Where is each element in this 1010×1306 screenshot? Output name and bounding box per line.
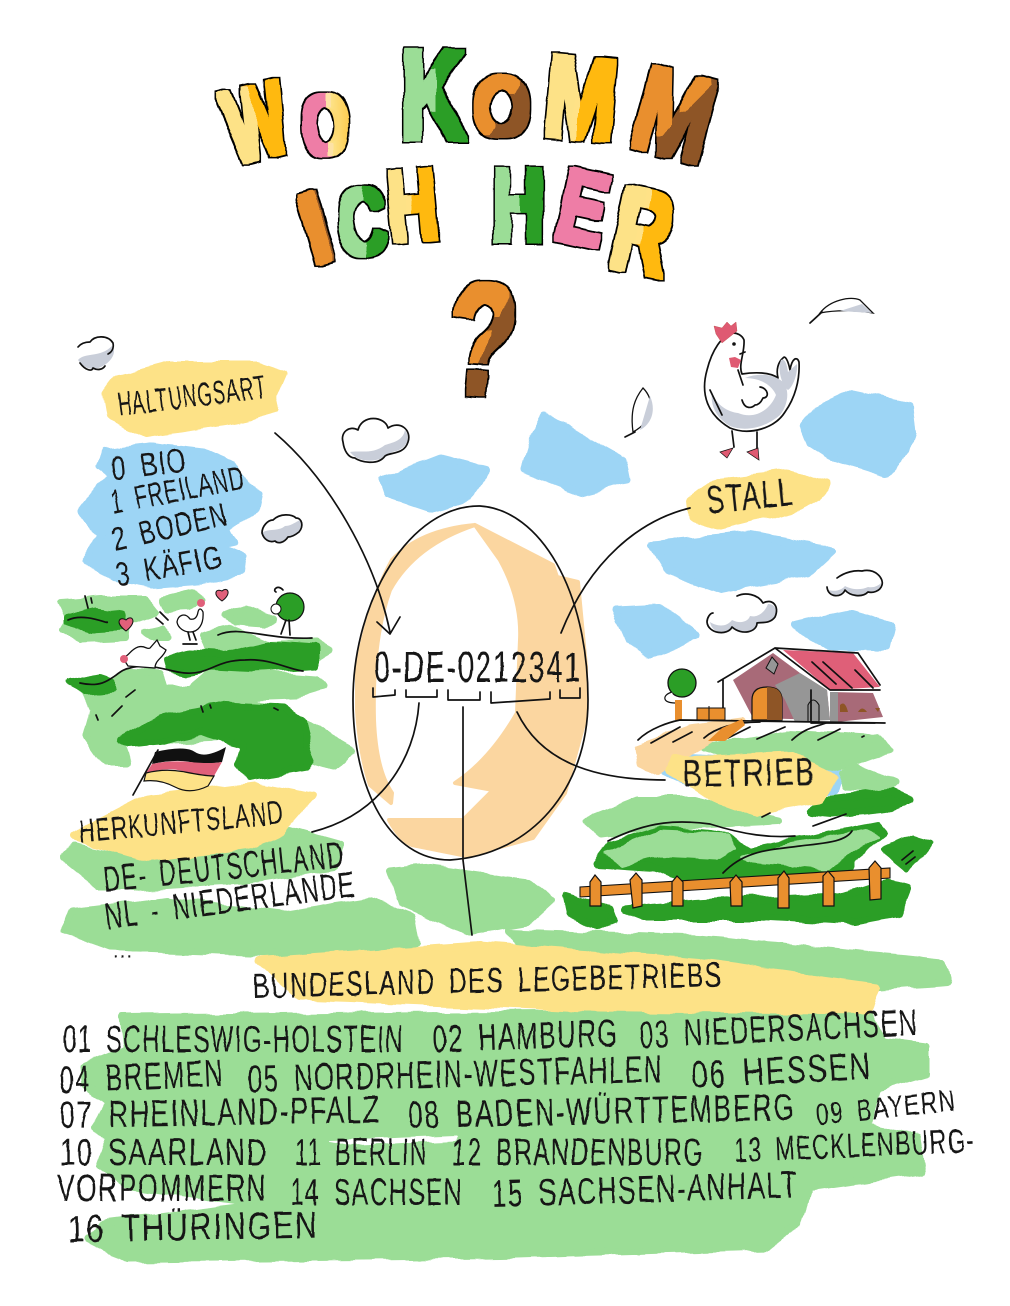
barn tree <box>665 669 696 720</box>
state list <box>57 1002 976 1251</box>
housing type list <box>107 441 248 593</box>
panel: Bundesland des Legebetriebs <box>57 956 976 1251</box>
label Betrieb: BETRIEB <box>682 752 816 796</box>
white gaps in the meadow <box>330 1136 457 1145</box>
scene: free range hens <box>68 587 312 720</box>
heading: HALTUNGSART <box>115 368 269 423</box>
state list: VORPOMMERN <box>57 1168 267 1210</box>
icon: German flag <box>133 747 226 795</box>
field lines <box>608 813 915 873</box>
question mark: ? <box>443 247 523 432</box>
country list: DE- DEUTSCHLAND <box>102 834 347 900</box>
state list: 05 NORDRHEIN-WESTFAHLEN <box>247 1049 664 1101</box>
amber stroke <box>708 719 745 741</box>
fence rails <box>580 868 890 897</box>
heading: HERKUNFTSLAND <box>77 793 286 850</box>
housing type list: 1 FREILAND <box>107 459 248 521</box>
egg shading <box>357 525 586 856</box>
state list: 01 SCHLESWIG-HOLSTEIN <box>63 1019 404 1061</box>
hearts <box>119 589 228 631</box>
cloud above barn <box>707 594 777 633</box>
code brackets <box>373 688 580 703</box>
icons: clouds <box>78 337 882 633</box>
cloud centre <box>342 418 409 462</box>
fence posts <box>590 861 881 908</box>
hen 1 <box>156 599 205 644</box>
egg with code <box>353 506 588 860</box>
state list: 15 SACHSEN-ANHALT <box>491 1164 799 1216</box>
country list: NL - NIEDERLANDE <box>103 863 358 937</box>
state list: 14 SACHSEN <box>290 1172 463 1214</box>
title line 1: K <box>400 22 466 167</box>
icon: feather top <box>810 299 873 323</box>
egg outline <box>353 506 588 860</box>
icon: large hen <box>705 322 799 460</box>
title line 2 <box>287 146 684 303</box>
country list: ... <box>113 941 133 963</box>
state list: 07 RHEINLAND-PFALZ <box>59 1089 381 1137</box>
connector: Betrieb <box>517 712 665 780</box>
panel: Stall with hen <box>625 299 873 523</box>
title line 1: O <box>474 60 530 153</box>
yellow label swashes <box>71 365 877 1012</box>
title line 1: M <box>540 31 622 166</box>
state list: 09 BAYERN <box>814 1084 958 1132</box>
panel: Herkunftsland <box>77 793 358 963</box>
state list: 12 BRANDENBURG <box>452 1132 704 1174</box>
title line 1 <box>213 22 729 189</box>
title line 2: C <box>335 167 389 278</box>
title line 1: M <box>620 40 729 189</box>
state list: 06 HESSEN <box>690 1046 873 1097</box>
state list: 10 SAARLAND <box>60 1132 268 1174</box>
connector: Haltungsart arrow <box>275 433 400 634</box>
fence <box>580 861 890 908</box>
sky brush: blue patches <box>80 393 912 797</box>
peach path <box>638 721 742 772</box>
heading: BUNDESLAND DES LEGEBETRIEBS <box>252 956 723 1006</box>
title line 2: H <box>382 148 442 264</box>
icon: feather middle <box>625 388 653 437</box>
hill lines <box>68 596 312 720</box>
title line 2: E <box>548 146 618 270</box>
hen 2 <box>120 640 166 668</box>
label Stall: STALL <box>704 470 796 523</box>
country list <box>102 834 358 963</box>
housing type list: 2 BODEN <box>108 495 232 558</box>
panel: Haltungsart <box>107 368 269 593</box>
light green highlights on right field <box>605 830 878 868</box>
cloud right <box>827 570 882 597</box>
state list: 04 BREMEN <box>59 1053 225 1102</box>
cloud far left <box>78 337 114 370</box>
egg code: 0-DE-0212341 <box>374 643 582 692</box>
dark green meadow patches <box>66 611 930 927</box>
state list: 02 HAMBURG <box>432 1013 619 1061</box>
background brush paint <box>60 365 947 1259</box>
panel: Betrieb scene <box>580 648 915 908</box>
title <box>213 22 729 432</box>
ground lines <box>638 720 885 743</box>
title line 2: H <box>492 147 544 263</box>
connector: Herkunftsland <box>312 703 419 832</box>
housing type list: 0 BIO <box>109 441 189 487</box>
tree <box>271 587 304 635</box>
cloud beside list <box>262 515 302 543</box>
title line 2: R <box>601 163 684 303</box>
state list: 08 BADEN-WÜRTTEMBERG <box>407 1087 796 1137</box>
title line 1: W <box>213 59 300 186</box>
housing type list: 3 KÄFIG <box>113 538 226 593</box>
title line 2: I <box>287 170 345 286</box>
connector: Bundesland <box>463 707 472 935</box>
small gate <box>697 706 725 720</box>
state list: 16 THÜRINGEN <box>67 1205 319 1251</box>
light green meadow patches <box>60 593 947 1259</box>
title line 1: O <box>299 75 351 175</box>
barn <box>718 648 883 723</box>
connector: Stall <box>561 508 690 633</box>
state list: 11 BERLIN <box>295 1132 428 1174</box>
